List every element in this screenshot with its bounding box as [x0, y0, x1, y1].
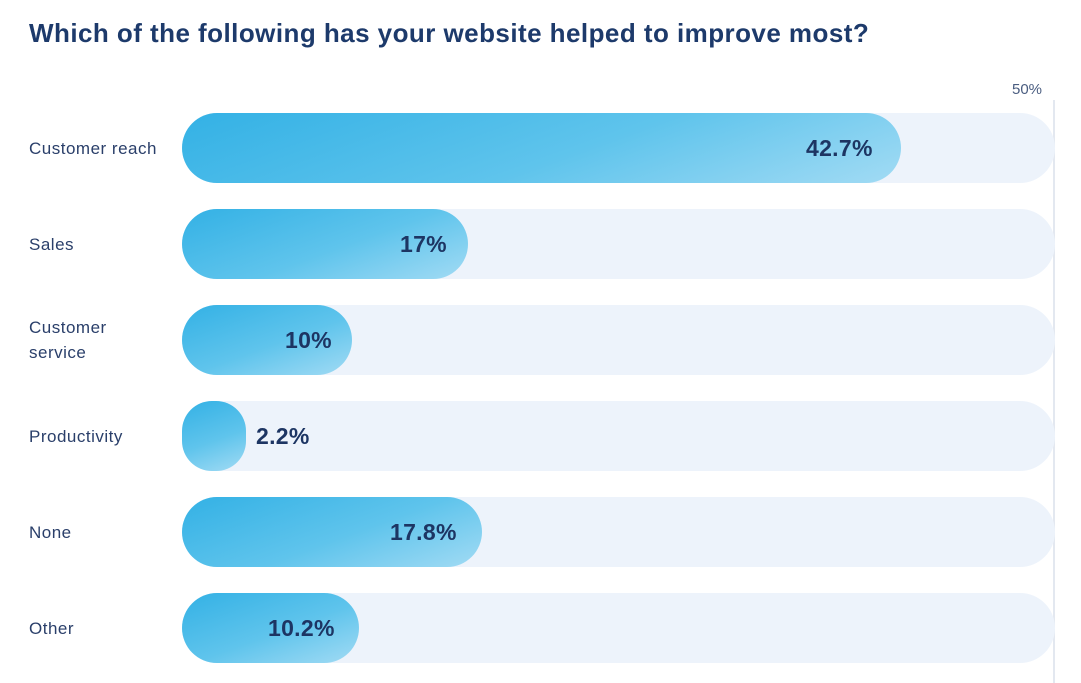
row: productivity: Productivity — [29, 427, 123, 446]
row: none: 17.8% — [390, 519, 457, 545]
row: customer service: service — [29, 343, 86, 362]
row: other: Other — [29, 619, 74, 638]
axis line — [1053, 100, 1055, 683]
row: other — [29, 593, 1055, 663]
row: sales — [29, 209, 1055, 279]
row: none: None — [29, 523, 72, 542]
row: customer service: 10% — [285, 327, 332, 353]
row: customer reach: 42.7% — [806, 135, 873, 161]
row: customer reach: Customer reach — [29, 139, 157, 158]
axis max label: 50% — [1012, 81, 1042, 98]
row: productivity: 2.2% — [256, 423, 310, 449]
row: customer service: Customer — [29, 318, 107, 337]
row: sales: 17% — [400, 231, 447, 257]
row: none — [29, 497, 1055, 567]
row: productivity — [29, 401, 1055, 471]
row: customer service — [29, 305, 1055, 375]
row: other: 10.2% — [268, 615, 335, 641]
title: Which of the following has your website helped to improve most? — [29, 18, 869, 48]
row: customer reach — [29, 113, 1055, 183]
row: sales: Sales — [29, 235, 74, 254]
